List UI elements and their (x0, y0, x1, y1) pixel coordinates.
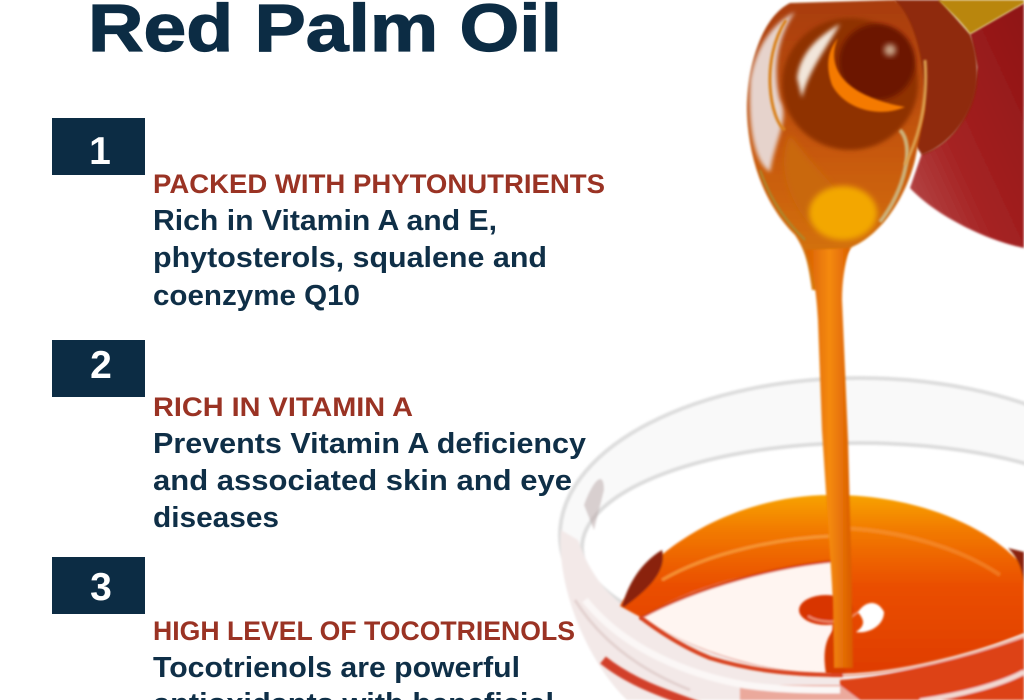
body 3 (153, 652, 554, 700)
body 2 (153, 428, 586, 534)
item 3: tocotrienols (52, 557, 575, 700)
bowl glass (560, 378, 1024, 700)
oil stream (806, 248, 853, 668)
body 2: diseases (153, 502, 279, 534)
bottle neck gold band (938, 0, 1024, 34)
number badge 3 (52, 557, 145, 614)
glass spout with oil (747, 0, 926, 290)
number badge 2: 2 (90, 344, 112, 387)
number badge 1 (52, 118, 145, 175)
number badge 2 (52, 340, 145, 397)
heading 3: HIGH LEVEL OF TOCOTRIENOLS (153, 616, 575, 646)
body 1: phytosterols, squalene and (153, 242, 547, 274)
body 1 (153, 205, 547, 312)
photo: bowl of red palm oil (560, 378, 1024, 700)
number badge 1: 1 (89, 130, 111, 173)
item 1: phytonutrients (52, 118, 605, 312)
bottle body (910, 3, 1024, 248)
front rim of bowl (575, 600, 1024, 700)
item 2: vitamin A (52, 340, 586, 534)
body 3: Tocotrienols are powerful (153, 652, 520, 684)
number badge 3: 3 (90, 566, 112, 609)
oil splash (799, 595, 884, 674)
bottle neck (895, 0, 977, 155)
oil pool (620, 495, 1024, 675)
body 2: Prevents Vitamin A deficiency (153, 428, 586, 460)
body 2: and associated skin and eye (153, 465, 572, 497)
heading 1: PACKED WITH PHYTONUTRIENTS (153, 169, 605, 199)
body 1: Rich in Vitamin A and E, (153, 205, 497, 237)
body 1: coenzyme Q10 (153, 280, 360, 312)
heading 2: RICH IN VITAMIN A (153, 392, 413, 422)
photo: bottle of red palm oil (747, 0, 1024, 668)
